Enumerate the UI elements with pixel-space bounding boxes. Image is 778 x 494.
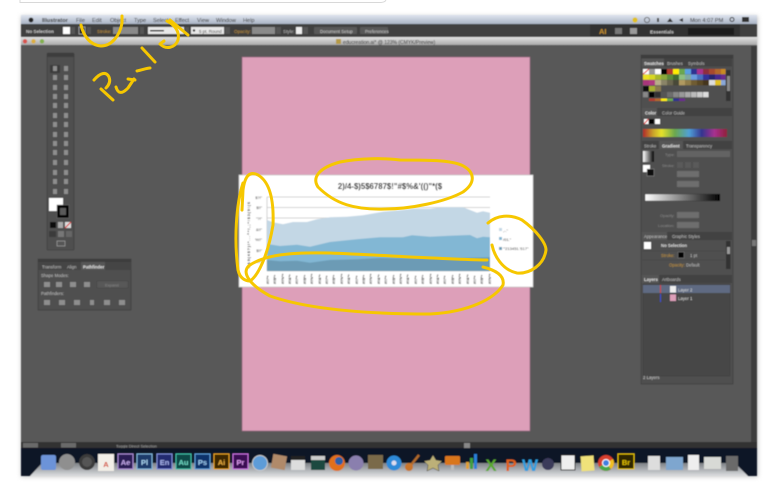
- control bar: Stroke:: [97, 29, 112, 34]
- x-axis labels: #!!%*+: [281, 274, 285, 284]
- mac menu bar: Mon 4:07 PM: [690, 18, 724, 24]
- layers panel: Artboards: [662, 277, 681, 282]
- gradient panel: Stroke:: [662, 163, 675, 168]
- x-axis labels: #!!%*+: [399, 274, 403, 284]
- document title bar: educreation.ai* @ 123% (CMYK/Preview): [343, 40, 436, 46]
- layers panel: 2 Layers: [643, 375, 659, 380]
- x-axis labels: #!!$*+: [362, 275, 366, 284]
- x-axis labels: #!!!*+: [414, 275, 418, 284]
- dock icons: Ai: [218, 458, 225, 467]
- annotation: handwritten word: [94, 20, 188, 100]
- pathfinder panel: Shape Modes:: [41, 273, 69, 278]
- control bar: [21, 24, 757, 38]
- control bar: Document Setup: [320, 29, 353, 34]
- control bar: Style:: [283, 29, 294, 34]
- y-axis labels: #!!": [256, 260, 263, 264]
- artboard: pink page: [242, 57, 530, 431]
- gradient panel: Opacity:: [660, 213, 675, 218]
- gradient panel: Location:: [658, 223, 674, 228]
- control bar: Preferences: [365, 29, 389, 34]
- y-axis labels: $?!": [255, 196, 263, 200]
- mac menu bar: Object: [110, 18, 127, 24]
- mac menu bar: Edit: [92, 18, 102, 24]
- pathfinder panel: Transform: [42, 264, 62, 270]
- status bar: [21, 442, 757, 448]
- dock icons: W: [522, 456, 539, 475]
- pathfinder panel: Pathfinder: [83, 264, 105, 270]
- control bar: Essentials: [650, 30, 674, 36]
- dock icons: Au: [178, 458, 189, 467]
- legend: [499, 228, 529, 251]
- mac menu bar: Help: [243, 18, 255, 24]
- x-axis labels: #!!$*+: [392, 275, 396, 284]
- annotation: circle around title: [316, 159, 472, 209]
- control bar: Opacity:: [234, 29, 251, 34]
- dock icons: Pl: [141, 458, 148, 467]
- pathfinder panel: Align: [67, 264, 77, 270]
- control bar: 5 pt. Round: [199, 29, 222, 34]
- dock icons: Ps: [198, 458, 207, 467]
- color panel: [642, 108, 732, 137]
- layers panel: [642, 275, 732, 380]
- mac menu bar: Select: [153, 18, 169, 24]
- area: mid series: [267, 235, 490, 271]
- mac menu bar: [21, 15, 757, 24]
- legend: "'213451.'617": [503, 246, 529, 251]
- right scrollbar: [751, 46, 757, 442]
- dock icons: Pr: [237, 458, 245, 467]
- x-axis labels: #!!&*+: [436, 274, 440, 284]
- mac dock: [21, 448, 757, 476]
- dock icons: [41, 454, 738, 475]
- canvas background: [21, 45, 757, 442]
- chart title: 2)/4-$)5$6787$!"#$%&'(()"*($: [338, 182, 443, 191]
- x-axis labels: #!!%*+: [310, 274, 314, 284]
- swatches panel: Swatches: [644, 61, 664, 66]
- x-axis labels: #!!&*+: [318, 274, 322, 284]
- x-axis labels: #!!!*+: [325, 275, 329, 284]
- appearance panel: Default: [686, 262, 700, 268]
- legend: ,-.": [503, 228, 509, 233]
- appearance panel: Opacity:: [669, 262, 685, 268]
- x-axis labels: #!!$*+: [332, 275, 336, 284]
- swatches panel: Brushes: [667, 61, 683, 66]
- x-axis labels: #!!!*+: [384, 275, 388, 284]
- pathfinder panel: Expand: [105, 282, 119, 288]
- annotation: circle around legend: [488, 216, 546, 273]
- mac menu bar: Illustrator: [42, 18, 69, 24]
- mac menu bar: Window: [216, 18, 237, 24]
- gradient panel: Type:: [665, 152, 675, 157]
- y-axis title: F&9(4$?)!*...^*!,;*!$3(9!(6: [247, 202, 251, 268]
- x-axis labels: #!!&*+: [377, 274, 381, 284]
- x-axis labels: #!!$*+: [480, 275, 484, 284]
- x-axis labels: #!!%*+: [488, 274, 492, 284]
- x-axis labels: #!!!*+: [355, 275, 359, 284]
- appearance panel: No Selection: [661, 243, 687, 248]
- x-axis labels: #!!!*+: [473, 275, 477, 284]
- x-axis labels: #!!$*+: [303, 275, 307, 284]
- mac menu bar: View: [197, 18, 210, 24]
- x-axis labels: #!!!*+: [266, 275, 270, 284]
- top browser box remnant: [20, 0, 386, 2]
- mac menu bar: Type: [134, 18, 146, 24]
- x-axis labels: #!!&*+: [466, 274, 470, 284]
- area: dark series: [267, 257, 490, 271]
- appearance panel: Stroke:: [661, 253, 675, 258]
- dock icons: Ae: [121, 458, 130, 467]
- x-axis labels: #!!$*+: [421, 275, 425, 284]
- color panel: Color Guide: [662, 110, 686, 116]
- gradient panel: Transparency: [686, 144, 713, 148]
- color panel: Color: [645, 110, 657, 116]
- appearance panel: Appearance: [644, 234, 668, 239]
- pathfinder panel: [38, 259, 131, 310]
- annotation: circle around y-axis: [236, 174, 273, 281]
- pathfinder panel: Pathfinders:: [41, 291, 64, 296]
- appearance panel: 1 pt: [690, 253, 698, 258]
- y-axis labels: "?!": [256, 217, 263, 221]
- x-axis labels: #!!%*+: [340, 274, 344, 284]
- x-axis labels: #!!%*+: [369, 274, 373, 284]
- x-axis labels: [266, 274, 492, 284]
- control bar: No Selection: [26, 29, 54, 34]
- control bar: AI: [599, 27, 606, 36]
- gradient panel: [642, 141, 732, 228]
- x-axis labels: #!!&*+: [406, 274, 410, 284]
- y-axis labels: [255, 196, 263, 264]
- legend: /01.": [503, 237, 512, 242]
- tools panel: [47, 53, 74, 250]
- x-axis labels: #!!$*+: [451, 275, 455, 284]
- x-axis labels: #!!!*+: [443, 275, 447, 284]
- layers panel: Layers: [644, 277, 658, 282]
- x-axis labels: #!!!*+: [295, 275, 299, 284]
- annotation: circle around menu: [81, 16, 122, 46]
- dock icons: X: [485, 456, 497, 475]
- y-axis labels: $!!": [256, 206, 263, 210]
- swatches panel: [642, 58, 732, 101]
- document title bar: [21, 37, 757, 46]
- dock icons: En: [160, 458, 170, 467]
- gradient panel: Gradient: [662, 144, 680, 148]
- annotation: circle around x-axis: [246, 253, 503, 314]
- dock icons: P: [505, 456, 517, 475]
- mac menu bar: Effect: [175, 18, 190, 24]
- chart on white band: [239, 175, 533, 287]
- gradient panel: Stroke: [644, 144, 657, 148]
- gridlines: [267, 197, 490, 271]
- x-axis labels: #!!$*+: [273, 275, 277, 284]
- appearance panel: [642, 232, 732, 269]
- mac menu bar: File: [76, 18, 85, 24]
- right panel dock: [641, 55, 733, 384]
- y-axis labels: %!!": [255, 238, 263, 242]
- y-axis labels: &!!": [256, 228, 263, 232]
- x-axis labels: #!!&*+: [347, 274, 351, 284]
- swatches panel: Symbols: [688, 61, 704, 66]
- y-axis labels: $!!": [256, 249, 263, 253]
- area: light series: [267, 207, 490, 271]
- appearance panel: Graphic Styles: [672, 234, 700, 239]
- layer 1 row: Layer 1: [678, 296, 693, 301]
- status bar: Toggle Direct Selection: [116, 443, 157, 448]
- dock icons: A: [103, 460, 109, 469]
- x-axis labels: #!!&*+: [288, 274, 292, 284]
- fill and stroke swatches: [49, 198, 69, 218]
- layer 2 row: Layer 2: [678, 288, 693, 292]
- x-axis labels: #!!%*+: [429, 274, 433, 284]
- x-axis labels: #!!%*+: [458, 274, 462, 284]
- dock icons: Br: [622, 458, 630, 467]
